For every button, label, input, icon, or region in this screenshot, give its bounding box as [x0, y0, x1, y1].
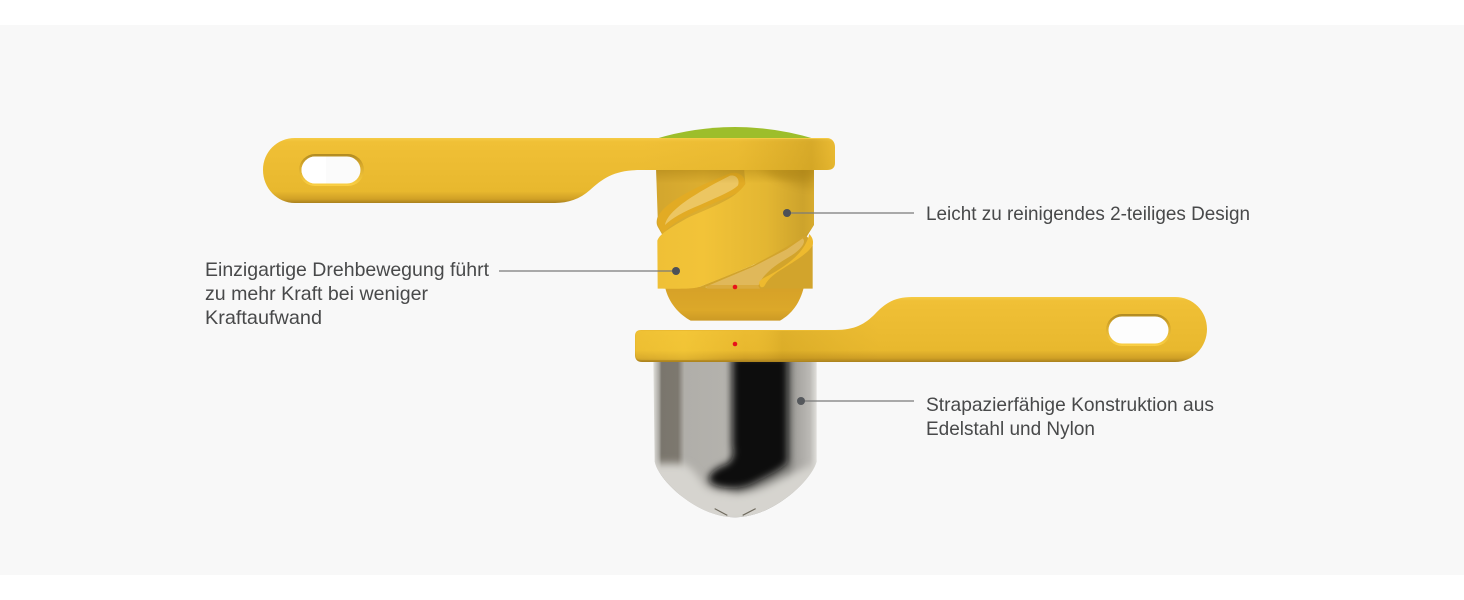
product: upper press part — [263, 127, 835, 321]
lower head shading — [636, 311, 880, 360]
shadow under head — [656, 170, 814, 181]
green lemon dome — [655, 127, 815, 139]
callout: rotation: Kraftaufwand — [205, 307, 322, 329]
lower window and lower right wall — [700, 234, 813, 289]
head shading on handle — [640, 139, 835, 170]
lower handle — [635, 297, 1207, 362]
callout: cleaning — [783, 203, 1250, 225]
polished steel dome — [650, 463, 820, 523]
lower handle hole — [1106, 314, 1171, 346]
lower tip marks — [715, 509, 756, 515]
cylinder and helical band — [656, 167, 814, 321]
main helical band — [657, 167, 814, 289]
callout: rotation: zu mehr Kraft bei weniger — [205, 283, 429, 305]
callout: rotation — [205, 259, 680, 329]
callout: material: Edelstahl und Nylon — [926, 418, 1095, 440]
upper handle — [263, 138, 835, 203]
callout: material: Strapazierfähige Konstruktion aus — [926, 394, 1214, 416]
upper helical slot — [657, 173, 745, 233]
handle hole — [299, 154, 364, 186]
upper cylinder body — [656, 167, 814, 237]
dark reflection — [709, 357, 788, 488]
callout: cleaning: Leicht zu reinigendes 2-teiliges Design — [926, 203, 1250, 225]
product: lower steel cup — [654, 362, 817, 518]
alignment marks — [733, 285, 737, 346]
callout: rotation: Einzigartige Drehbewegung führt — [205, 259, 490, 281]
callout: material — [797, 394, 1214, 440]
hemispherical bottom — [665, 287, 804, 321]
